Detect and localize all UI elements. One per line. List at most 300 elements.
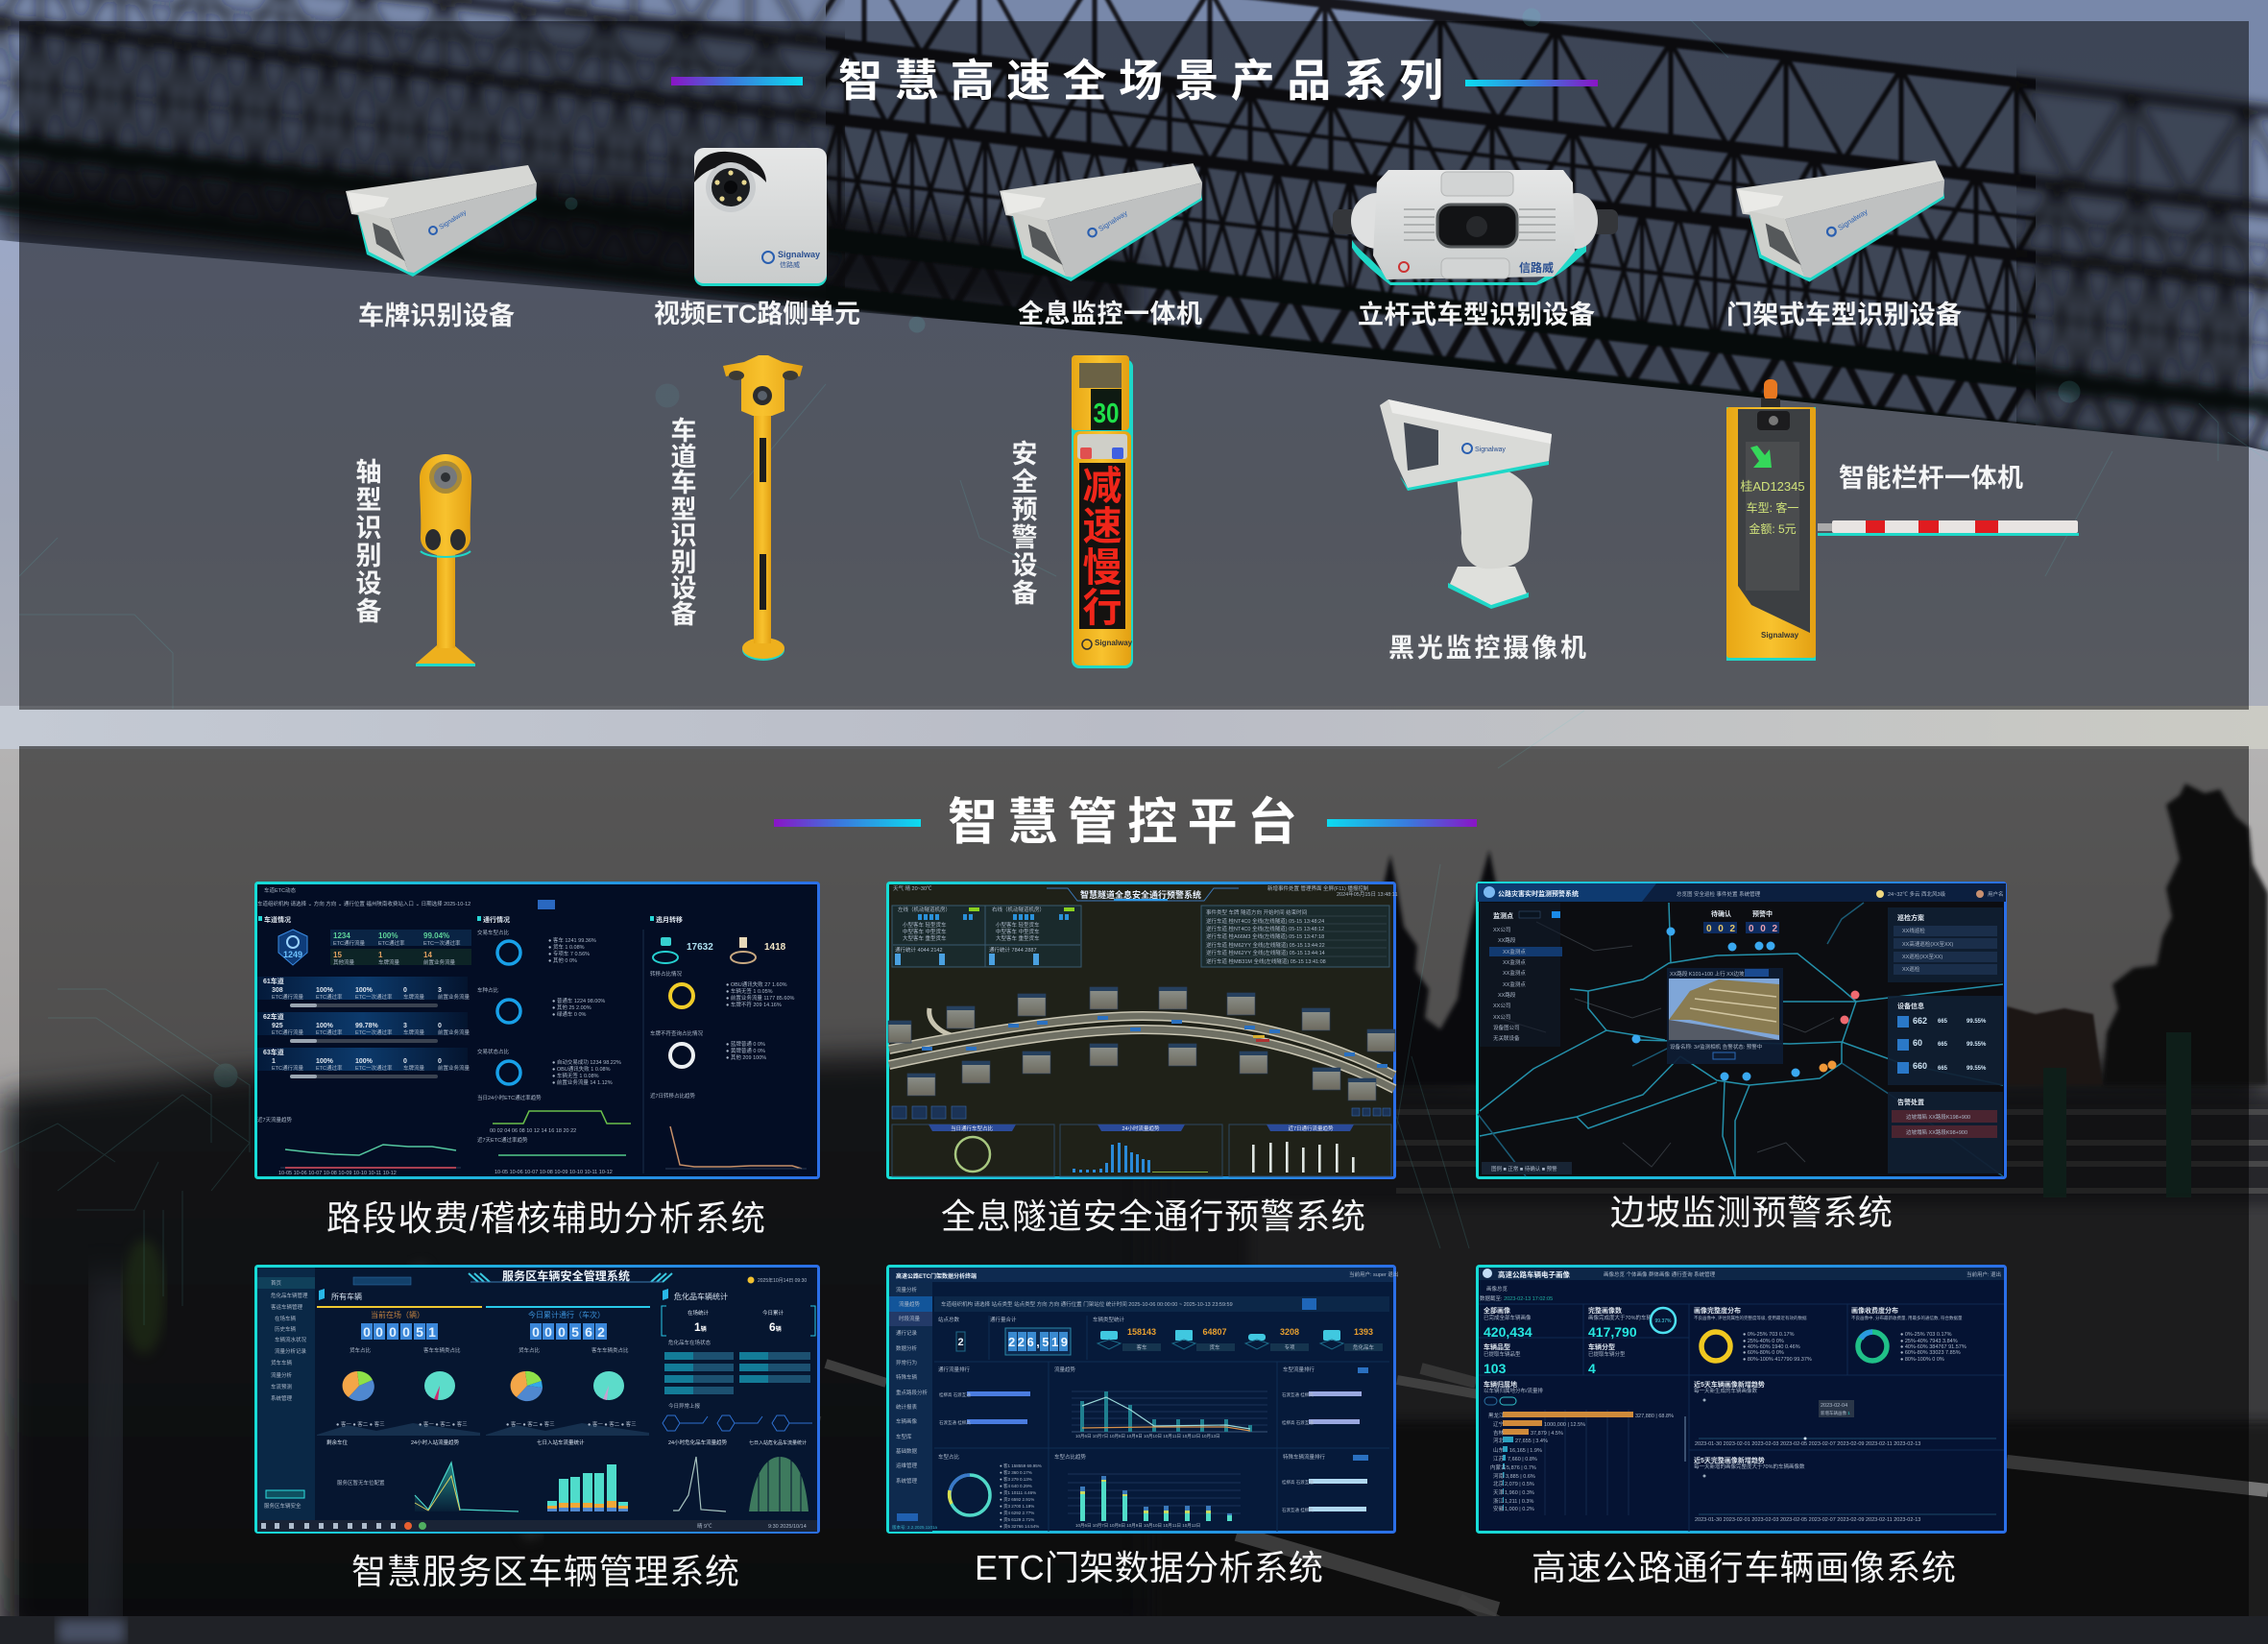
lane rows: 0 <box>403 987 407 994</box>
chart: seven day flow: 近7天流量趋势 <box>257 1116 293 1124</box>
counters <box>361 1323 607 1340</box>
section: all vehicles: 0 <box>544 1324 552 1340</box>
lane rows: 车牌流量 <box>403 1064 425 1072</box>
event table: 逆行车道 桂NT4C0 全线(左线隧道) 05-15 13:48:24 <box>1206 917 1324 925</box>
icon: dual lens housing: 信路威 <box>1519 260 1554 275</box>
system title: 服务区车辆安全管理系统 <box>502 1269 630 1283</box>
icon: dual lens housing <box>1333 170 1618 285</box>
sidebar: 货车车辆 <box>271 1359 293 1366</box>
chart: vehicle type ranking: 车型流量排行 <box>1283 1366 1315 1373</box>
traffic info panels: 小型客车 轻型货车 <box>996 921 1040 929</box>
KPI cards: 已提取车辆分型 <box>1588 1350 1626 1358</box>
traffic info panels: 通行统计 7844 2887 <box>989 946 1037 954</box>
lane rows: 车牌流量 <box>403 993 425 1001</box>
event table: 逆行车道 桂MB31M 全线(左线隧道) 05-15 13:41:08 <box>1206 957 1326 965</box>
vertical label: 车 <box>670 417 697 446</box>
sidebar: 车辆流水状况 <box>275 1336 307 1343</box>
KPI cards: 417,790 <box>1588 1324 1637 1340</box>
label: 智能栏杆一体机 <box>1839 464 2023 493</box>
label: 全息监控一体机 <box>1018 300 1202 328</box>
right side panels: 660 <box>1913 1061 1927 1071</box>
right side panels: 边坡塌陷 XX路段K98+900 <box>1906 1128 1967 1136</box>
system title: 智慧隧道全息安全通行预警系统 <box>1080 889 1201 900</box>
caption: tunnel safety warning: 全息隧道安全通行预警系统 <box>941 1197 1365 1236</box>
chart: vehicle share donut: ● 货5 6129 2.71% <box>1000 1516 1034 1523</box>
icon: PTZ camera: Signalway <box>1475 447 1506 453</box>
bar chart: vehicle origin: 黑龙江 <box>1488 1412 1505 1419</box>
section: hazardous vehicles: 危化品车在场状态 <box>668 1339 712 1346</box>
KPI row: 危化品车 <box>1353 1343 1374 1351</box>
donut: completeness distribution: 不良画像中, 评估到属性的完整度等级, 使用最近有效的数据 <box>1694 1315 1807 1321</box>
sidebar: 客运车辆管理 <box>271 1303 303 1311</box>
section: traffic: ● 其他 25 2.00% <box>552 1003 591 1011</box>
lane rows: 车牌流量 <box>403 1028 425 1036</box>
lane rows: 925 <box>272 1023 283 1029</box>
hourly bars <box>1073 1143 1150 1173</box>
event table: 逆行车道 桂A66M3 全线(左线隧道) 05-15 13:47:18 <box>1206 932 1324 940</box>
KPI row: 货车 <box>1209 1343 1220 1351</box>
bar chart: vehicle origin: 吉林 <box>1493 1429 1505 1437</box>
frame <box>1477 1266 2005 1533</box>
KPI cards: 画像完成度大于70%的车辆 <box>1588 1314 1653 1321</box>
label: 门架式车型识别设备 <box>1726 301 1962 329</box>
chart: special vehicle ranking: 桂柳高 石渡互通 <box>1282 1479 1314 1486</box>
section: all vehicles: 1 <box>428 1324 436 1340</box>
section: special transfer: ● 黄牌普通 0 0% <box>726 1047 765 1054</box>
lane rows: 100% <box>316 1023 334 1029</box>
section: all vehicles: 0 <box>363 1324 371 1340</box>
vertical label: 设 <box>670 574 697 603</box>
sidebar: 车流预测 <box>271 1383 293 1390</box>
section: lanes: 15 <box>333 951 342 959</box>
traffic info panels <box>892 906 1081 967</box>
section: special transfer: 1418 <box>764 942 786 953</box>
frame <box>887 1266 1394 1533</box>
bar chart: vehicle origin: 内蒙古 <box>1490 1463 1507 1471</box>
right side panels: 60 <box>1913 1038 1922 1048</box>
section: lanes: 1249 <box>283 950 302 959</box>
lane rows: ETC通过率 <box>316 1064 343 1072</box>
header: 高速公路车辆电子画像 <box>1498 1269 1570 1279</box>
system title: 2025年10月14日 09:30 <box>758 1277 807 1284</box>
header: 高速公路ETC门架数据分析终端 <box>896 1272 977 1280</box>
bottom chart panels: 近7日通行流量趋势 <box>1288 1124 1334 1132</box>
chart: vehicle share donut: ● 货6 32766 14.54% <box>1000 1523 1039 1530</box>
divider <box>642 930 644 1173</box>
panel: product range overlay <box>19 21 2249 710</box>
icon: roadside unit: Signalway <box>778 250 820 259</box>
donut charts <box>497 941 520 1084</box>
section: traffic: ● 其他 0 0% <box>548 956 577 964</box>
heading accent right <box>1465 80 1598 86</box>
lane rows: 100% <box>316 987 334 994</box>
vertical label: 安 <box>1012 440 1037 469</box>
charts row <box>326 1438 807 1511</box>
section: traffic: ● 专项车 7 0.56% <box>548 950 590 957</box>
header: 数据截至: 2023-02-13 17:02:05 <box>1480 1294 1553 1302</box>
section: all vehicles: 0 <box>389 1324 397 1340</box>
system title: 新增事件处置 管理界面 全屏(F11) 播报控制 <box>1267 884 1369 892</box>
section: special transfer: 车牌不符查询占比情况 <box>650 1029 704 1037</box>
legend <box>1482 1162 1572 1174</box>
section: lanes: 14 <box>423 951 432 959</box>
event table <box>1201 906 1389 967</box>
left list <box>1480 903 1562 1047</box>
dashboard: ETC gantry data analysis <box>887 1266 1398 1533</box>
left list: XX监测点 <box>1503 969 1526 977</box>
sidebar: 运维管理 <box>896 1462 918 1469</box>
charts row: 服务区暂无车位配置 <box>337 1479 385 1487</box>
vertical label: 设 <box>355 569 382 598</box>
label: 黑光监控摄像机 <box>1388 634 1586 663</box>
right side panels: 边坡塌陷 XX路段K198+900 <box>1906 1113 1970 1121</box>
donut: freshness distribution: ● 25%-40% 7943 3.84% <box>1900 1339 1958 1344</box>
line chart: new profiles <box>1694 1380 1996 1447</box>
bar chart: vehicle origin: 27,655 | 3.4% <box>1515 1438 1548 1444</box>
system title: 2024年05月15日 13:48:11 <box>1337 890 1398 898</box>
charts row: 剩余车位 <box>326 1438 349 1446</box>
KPI cards: 103 <box>1484 1361 1507 1376</box>
dashboard: service area vehicle management <box>255 1266 818 1533</box>
sidebar <box>889 1282 937 1532</box>
left list: 设备图公司 <box>1493 1024 1520 1031</box>
filter bar <box>934 1296 1389 1312</box>
donut: completeness distribution: ● 25%-40% 0 0% <box>1743 1339 1784 1344</box>
header <box>1479 1268 2004 1302</box>
icon: camera housing <box>1000 163 1202 281</box>
warning text: 减 <box>1083 464 1122 508</box>
line chart: new profiles: 每一天新生成的车辆画像数 <box>1694 1387 1758 1394</box>
dashboard: toll and audit analysis <box>255 883 818 1177</box>
donut: freshness distribution: ● 60%-80% 33023 7.85% <box>1900 1350 1961 1356</box>
sidebar: 异常行为 <box>896 1359 917 1366</box>
KPI row: 客车 <box>1136 1343 1147 1351</box>
taskbar: 晴 9℃ <box>697 1522 712 1530</box>
frame <box>255 1266 818 1533</box>
right side panels: 99.55% <box>1966 1019 1987 1025</box>
charts row: 24小时入站流量趋势 <box>411 1438 460 1446</box>
chart: vehicle share donut: ● 客3 279 0.13% <box>1000 1476 1032 1483</box>
sidebar: 数据分析 <box>896 1344 918 1352</box>
sidebar: 在场车辆 <box>275 1315 297 1322</box>
section: traffic: ● 货车 1 0.08% <box>548 943 585 951</box>
vertical label: 备 <box>670 600 697 629</box>
left list: XX路段 <box>1498 991 1516 999</box>
donut: completeness distribution: ● 40%-60% 1940 0.46% <box>1743 1344 1800 1350</box>
right side panels <box>1888 907 2003 1173</box>
right side panels: XX巡检(XX至XX) <box>1902 953 1942 960</box>
icon: yellow axle pole <box>416 454 475 666</box>
donut: completeness distribution: 画像完整度分布 <box>1694 1306 1741 1315</box>
bar chart: vehicle origin <box>1484 1380 1686 1515</box>
KPI row: 2 <box>957 1337 964 1348</box>
section: special transfer: ● 其他 209 100% <box>726 1053 766 1061</box>
bar chart: vehicle origin: 以车辆归属地分布/流量排 <box>1484 1387 1544 1394</box>
dashboard: tunnel safety warning <box>887 883 1398 1177</box>
lane rows: 61车道 <box>263 977 284 985</box>
header: 当前用户: super 退出 <box>1349 1270 1398 1278</box>
section: traffic: 车种占比 <box>477 986 499 994</box>
event table: 逆行车道 桂NT4C0 全线(左线隧道) 05-15 13:48:12 <box>1206 925 1324 932</box>
event table: 逆行车道 桂M62YY 全线(左线隧道) 05-15 13:44:14 <box>1206 949 1325 956</box>
bottom chart panels: 当日通行车型占比 <box>951 1124 993 1132</box>
view buttons <box>892 1106 1390 1119</box>
frame <box>1477 883 2005 1177</box>
icon: warning sign pole: Signalway <box>1095 639 1133 647</box>
chart: vehicle share donut: 车型占比 <box>938 1453 960 1461</box>
heading text: 智慧高速全场景产品系列 <box>838 56 1443 106</box>
lane rows: ETC通过率 <box>316 1028 343 1036</box>
system title: 天气 晴 20~30℃ <box>893 884 932 892</box>
KPI cards: 99.37% <box>1655 1318 1672 1324</box>
line chart: complete profiles: 每一天新增的画像完整度大于70%的车辆画像数 <box>1694 1463 1805 1470</box>
event table: 事件类型 车牌 隧道方向 开始时间 结束时间 <box>1206 908 1307 916</box>
vertical label: 别 <box>355 542 382 570</box>
lane rows: 前置业务流量 <box>438 1064 470 1072</box>
section: all vehicles: 货车占比 <box>519 1346 541 1354</box>
section: traffic: ● 自动交易成功 1234 98.22% <box>552 1058 621 1066</box>
icon: barrier cabinet: 金额: 5元 <box>1749 521 1797 536</box>
section: traffic: ● 车辆无签 1 0.08% <box>552 1072 599 1079</box>
legend: 图例 ■ 正常 ■ 待确认 ■ 预警 <box>1491 1165 1557 1173</box>
KPI cards: 420,434 <box>1484 1324 1532 1340</box>
left list: 无关联设备 <box>1493 1034 1520 1042</box>
warning text: 行 <box>1083 586 1122 630</box>
chart: special vehicle ranking <box>1282 1453 1368 1513</box>
heading accent left <box>774 819 921 827</box>
left list: 监测点 <box>1493 911 1513 920</box>
bar chart: vehicle origin: 安徽 <box>1493 1505 1505 1512</box>
traffic info panels: 大型客车 重型货车 <box>903 934 947 942</box>
filter bar <box>257 886 555 909</box>
chart: vehicle type ranking: 石渡互通 桂柳高 <box>1282 1391 1314 1398</box>
section: all vehicles: 客车车辆类占比 <box>423 1346 461 1354</box>
vertical label: 车 <box>670 469 697 497</box>
bar chart: vehicle origin: 河北 <box>1493 1437 1505 1444</box>
KPI cards: 全部画像 <box>1484 1306 1510 1315</box>
lane rows: 3 <box>403 1023 407 1029</box>
section: all vehicles: 当前在场（辆） <box>371 1310 424 1319</box>
label: 视频ETC路侧单元 <box>654 300 860 328</box>
lane rows <box>257 977 470 1078</box>
chart: left ranking: 石渡互通 桂柳高 <box>939 1419 971 1426</box>
section: traffic: ● 客车 1241 99.36% <box>548 936 596 944</box>
header bar: 公路灾害实时监测预警系统 <box>1498 889 1579 898</box>
section: all vehicles: ● 客一 ● 客二 ● 客三 <box>336 1420 385 1428</box>
section: special transfer: 逃月转移 <box>656 915 683 924</box>
taskbar <box>257 1520 817 1532</box>
left list: XX公司 <box>1493 1014 1510 1021</box>
KPI cards: 已完成全部车辆画像 <box>1484 1314 1532 1321</box>
bar chart: vehicle origin: 辽宁 <box>1493 1420 1505 1428</box>
lane rows: ETC通行流量 <box>272 993 304 1001</box>
lane rows: ETC一次通过率 <box>355 1028 393 1036</box>
bar chart: vehicle origin: 327,880 | 68.8% <box>1635 1414 1674 1419</box>
section: traffic: ● 绿通车 0 0% <box>552 1010 587 1018</box>
lane rows: 0 <box>438 1023 442 1029</box>
sidebar: 统计报表 <box>896 1403 918 1411</box>
vertical label: 识 <box>355 514 382 543</box>
vertical label: 轴 <box>355 458 382 487</box>
bar chart: vehicle origin: 1,211 | 0.3% <box>1505 1499 1533 1505</box>
product: holographic monitoring camera <box>1000 163 1202 328</box>
icon: yellow lane pole <box>723 355 803 661</box>
chart: seven day flow <box>257 1116 461 1176</box>
left list: XX路段 <box>1498 936 1516 944</box>
bar chart: vehicle origin: 2,079 | 0.5% <box>1505 1482 1534 1487</box>
donut: completeness distribution: ● 60%-80% 0 0% <box>1743 1350 1784 1356</box>
lane rows: 100% <box>355 1058 374 1065</box>
sidebar: 系统管理 <box>896 1477 918 1485</box>
sidebar: 首页 <box>271 1279 282 1287</box>
KPI row <box>938 1316 1383 1355</box>
section: traffic: 00 02 04 06 08 10 12 14 16 18 20 22 <box>490 1128 576 1134</box>
KPI cards: 车辆品型 <box>1484 1342 1510 1351</box>
event table: 逆行车道 桂M62YY 全线(左线隧道) 05-15 13:44:22 <box>1206 941 1325 949</box>
vertical label: 型 <box>670 496 697 524</box>
caption: service area vehicle management: 智慧服务区车辆管理系统 <box>351 1552 739 1591</box>
frame <box>255 883 818 1177</box>
right side panels: XX巡检 <box>1902 965 1920 973</box>
chart: vehicle share donut <box>938 1453 1042 1530</box>
lane rows: 100% <box>355 987 374 994</box>
section: all vehicles: 货车占比 <box>350 1346 372 1354</box>
system title <box>353 1269 807 1285</box>
alarm counters: 预警中 <box>1752 909 1773 918</box>
section: all vehicles: 5 <box>571 1324 579 1340</box>
section: lanes: 1 <box>378 951 383 959</box>
traffic info panels: 通行统计 4044 2142 <box>895 946 943 954</box>
caption: ETC gantry data analysis: ETC门架数据分析系统 <box>975 1548 1323 1587</box>
section: lanes: ETC通过率 <box>378 939 405 947</box>
taskbar: 9:30 2025/10/14 <box>768 1524 807 1530</box>
lane rows: ETC一次通过率 <box>355 1064 393 1072</box>
section: special transfer: 转移占比情况 <box>650 970 683 978</box>
section: all vehicles: 所有车辆 <box>331 1292 362 1301</box>
section: traffic <box>477 915 631 1175</box>
vertical label: 全 <box>1012 468 1037 496</box>
section: hazardous vehicles: 今日累计 <box>762 1309 784 1317</box>
vertical label: 警 <box>1012 523 1037 552</box>
bar chart: vehicle origin: 天津 <box>1493 1489 1505 1496</box>
left list: XX监测点 <box>1503 948 1526 955</box>
donut: freshness distribution: 画像收费度分布 <box>1851 1306 1898 1315</box>
section: traffic: 当日24小时ETC通过率趋势 <box>477 1094 542 1101</box>
section: all vehicles <box>317 1289 650 1436</box>
section: traffic: ● 前置业务流量 14 1.12% <box>552 1078 613 1086</box>
section: traffic: ● OBU通讯失败 1 0.08% <box>552 1065 611 1073</box>
bar chart: vehicle origin: 江苏 <box>1493 1455 1505 1463</box>
right side panels: 巡检方案 <box>1897 913 1924 922</box>
left list: XX监测点 <box>1503 958 1526 966</box>
lane rows: ETC一次通过率 <box>355 993 393 1001</box>
bottom chart panels <box>892 1124 1391 1176</box>
section: traffic: ● 普通车 1224 98.00% <box>552 997 605 1004</box>
filter bar: 车道组织机构 请选择 站点类型 站点类型 方向 方向 通行位置 门架站位 统计时间 2025-10-06 00:00:00 ~ 2025-10-13 23:59:59 <box>941 1300 1233 1308</box>
lane rows: 0 <box>403 1058 407 1065</box>
alarm counters: 002 <box>1749 924 1777 934</box>
section: special transfer: ● 车辆无签 1 0.05% <box>726 987 773 995</box>
product: pole type vehicle recognition <box>1333 170 1618 329</box>
chart: vehicle share donut: ● 客4 640 0.29% <box>1000 1483 1032 1489</box>
bar chart: vehicle origin: 1,960 | 0.3% <box>1505 1490 1534 1496</box>
section: hazardous vehicles <box>662 1289 815 1511</box>
map pins <box>1632 928 1859 1081</box>
icon: beacon <box>1761 379 1780 407</box>
line chart: new profiles: 近5天车辆画像新增趋势 <box>1694 1380 1765 1389</box>
left list: XX公司 <box>1493 1003 1510 1009</box>
right side panels: 665 <box>1938 1042 1948 1048</box>
product: smart barrier all-in-one <box>1726 379 2079 661</box>
chart: vehicle type ranking <box>1282 1366 1368 1426</box>
line chart: new profiles: 2023-01-30 2023-02-01 2023-02-03 2023-02-05 2023-02-07 2023-02-09 2023-02-11 2023-02-13 <box>1695 1441 1920 1447</box>
KPI row: 通行量合计 <box>990 1316 1017 1323</box>
donut: freshness distribution: ● 40%-60% 384767 91.57% <box>1900 1344 1966 1350</box>
sidebar: 车辆画像 <box>896 1417 918 1425</box>
traffic info panels: 中型客车 中型货车 <box>903 928 947 935</box>
icon: camera housing <box>1736 160 1944 282</box>
section: lanes <box>258 915 471 966</box>
lane rows: 3 <box>438 987 442 994</box>
product: video ETC roadside unit <box>654 148 860 328</box>
alarm counters: 002 <box>1706 924 1735 934</box>
weekly bars <box>1252 1142 1355 1173</box>
KPI row: 158143 <box>1127 1327 1156 1337</box>
traffic info panels: 左线（机动隧道机房） <box>898 906 951 913</box>
chart: vehicle type ranking: 桂柳高 石渡互通 <box>1282 1419 1314 1426</box>
bottom chart panels: 24小时流量趋势 <box>1122 1124 1160 1132</box>
section: all vehicles: 0 <box>375 1324 383 1340</box>
sidebar: 流量分析记录 <box>275 1347 307 1355</box>
bar chart: vehicle origin: 5,876 | 0.7% <box>1507 1465 1536 1471</box>
lane rows: 前置业务流量 <box>438 1028 470 1036</box>
heading accent left <box>671 77 803 85</box>
icon: camera housing <box>346 165 537 277</box>
section: all vehicles: ● 客一 ● 客二 ● 客三 <box>506 1420 555 1428</box>
sidebar: 流量分析 <box>896 1286 918 1293</box>
alarm counters <box>1703 909 1779 934</box>
product: lane vehicle recognition device <box>670 355 803 661</box>
chart: vehicle share trend bars: 车型占比趋势 <box>1054 1453 1087 1461</box>
right side panels: 设备信息 <box>1897 1002 1924 1010</box>
right side panels: 665 <box>1938 1019 1948 1025</box>
chart: vehicle share donut: ● 货4 6292 2.77% <box>1000 1510 1034 1516</box>
section: all vehicles: ● 客一 ● 客二 ● 客三 <box>419 1420 468 1428</box>
KPI cards: 4 <box>1588 1361 1596 1376</box>
line chart: complete profiles: 2023-01-30 2023-02-01 2023-02-03 2023-02-05 2023-02-07 2023-02-09 2023-02-11 2023-02-13 <box>1695 1517 1920 1523</box>
donut: freshness distribution <box>1851 1306 1966 1363</box>
section: special transfer: 近7日转移占比趋势 <box>650 1092 696 1100</box>
heading: control platform <box>774 795 1477 851</box>
chart: flow trend <box>1054 1366 1267 1439</box>
icon: barrier cabinet: Signalway <box>1761 631 1799 640</box>
sidebar: 系统管理 <box>271 1394 293 1402</box>
right side panels: 告警处置 <box>1897 1098 1924 1106</box>
donut <box>955 1137 990 1172</box>
chart: vehicle share donut: ● 客1 158559 69.95% <box>1000 1463 1042 1469</box>
section: all vehicles: 0 <box>558 1324 566 1340</box>
system title <box>893 884 1398 901</box>
map roads <box>1478 903 2003 1176</box>
charts row: 七日入站危化品车流量统计 <box>749 1439 807 1446</box>
KPI row: 站点总数 <box>938 1316 960 1323</box>
vertical label: 别 <box>670 548 697 577</box>
vertical label: 道 <box>670 443 697 471</box>
donut: completeness distribution <box>1694 1306 1812 1363</box>
sidebar: 流量趋势 <box>899 1300 921 1308</box>
KPI cards: 完整画像数 <box>1588 1306 1622 1315</box>
sidebar: 历史车辆 <box>275 1325 297 1333</box>
